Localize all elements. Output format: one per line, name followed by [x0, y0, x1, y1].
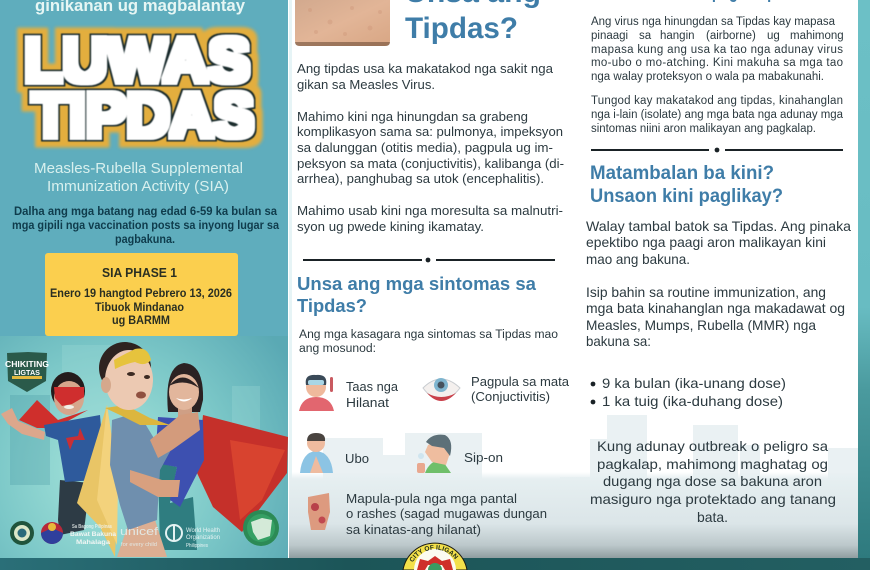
text block: outbreak note: Kung adunay outbreak o peligro sa [597, 438, 828, 454]
text block: measles description: peksyon sa mata (conjuctivitis), kalibanga (di- [297, 156, 564, 171]
heading: treatment and prevention [590, 162, 783, 207]
subtitle: Measles-Rubella Supplemental [34, 161, 243, 177]
symptom: cough: Ubo [345, 451, 369, 466]
instruction text [12, 206, 280, 246]
logo: World Health Organization: Philippines [186, 543, 208, 549]
list: vaccine dose schedule [591, 375, 786, 409]
badge: Chikiting Ligtas shield [5, 352, 49, 392]
illustration: girl hero [155, 363, 288, 550]
text block: vaccine prevention: bakuna sa: [586, 333, 651, 349]
logo: Bagong Pilipinas [41, 522, 63, 544]
logo: UNICEF: for every child [121, 542, 157, 548]
logo: Bawat Bakuna Mahalaga: Bawat Bakuna [70, 531, 116, 538]
logo: green emblem [243, 510, 279, 546]
text block: measles description: Mahimo usab kini nga moresulta sa malnutri- [297, 203, 563, 218]
symptom: red eyes: Pagpula sa mata [471, 374, 570, 389]
badge: Chikiting Ligtas shield: CHIKITING [5, 359, 49, 369]
heading: what is measles: Tipdas? [405, 12, 518, 45]
text block: how measles spreads: ug [767, 30, 780, 42]
icon: coughing person [300, 433, 333, 473]
logo: UNICEF [120, 526, 159, 548]
text block: vaccine prevention [586, 218, 851, 349]
text block: measles description: Ang tipdas usa ka makatakod nga sakit nga [297, 61, 554, 76]
symptom: red eyes: (Conjuctivitis) [471, 389, 550, 404]
text block: measles description [297, 61, 564, 234]
callout: SIA phase 1 dates: Enero 19 hangtod Pebrero 13, 2026 [50, 288, 232, 300]
list: vaccine dose schedule: 9 ka bulan (ika-unang dose) [602, 375, 786, 391]
subtitle: Immunization Activity (SIA) [47, 179, 229, 195]
heading: symptoms: Unsa ang mga sintomas sa [297, 273, 537, 294]
logo: UNICEF: unicef [120, 526, 159, 538]
text block: vaccine prevention: mao ang bakuna. [586, 251, 690, 267]
heading: what is measles [405, 0, 541, 45]
symptom: rashes [308, 491, 547, 537]
icon: red eye [423, 378, 460, 401]
heading: treatment and prevention: Matambalan ba kini? [590, 162, 774, 184]
instruction text: pagbakuna. [115, 234, 175, 246]
logo: City of Iligan seal: CITY OF ILIGAN [410, 545, 458, 562]
instruction text: mga gipili nga vaccination posts sa inyong lugar sa [12, 220, 280, 232]
symptom: fever: Hilanat [346, 395, 389, 410]
text block: measles description: syon ug pwede kining ikamatay. [297, 219, 484, 234]
text block: how measles spreads: Tungod kay makatakod ang tipdas, kinahanglan [591, 95, 843, 107]
callout: SIA phase 1 dates [45, 253, 238, 336]
campaign logotype [24, 26, 254, 150]
logo: Bawat Bakuna Mahalaga: Mahalaga [76, 539, 110, 546]
text block: how measles spreads: pinaagi [591, 30, 628, 42]
symptom: red eyes [423, 374, 570, 404]
callout: SIA phase 1 dates: SIA PHASE 1 [102, 266, 177, 280]
text block: symptoms intro: ang mosunod: [299, 343, 376, 355]
symptom: rashes: Mapula-pula nga mga pantal [346, 491, 517, 506]
faded skyline background [289, 415, 858, 558]
photo: measles rash on skin [295, 0, 390, 46]
partner logos row [10, 510, 279, 549]
text block: vaccine prevention: Isip bahin sa routine immunization, ang [586, 284, 826, 300]
instruction text: Dalha ang mga batang nag edad 6-59 ka bulan sa [14, 206, 278, 218]
logo: Bawat Bakuna Mahalaga [70, 524, 116, 546]
text block: measles description: sa dalunggan (otitis media), pagpula ug im- [297, 140, 553, 155]
callout: SIA phase 1 dates: ug BARMM [112, 315, 170, 327]
right edge strip [858, 0, 870, 558]
logo: Bawat Bakuna Mahalaga: Sa Bagong Pilipinas [72, 524, 112, 530]
text block: measles description: Mahimo kini nga hinungdan sa grabeng [297, 109, 528, 124]
symptom: fever: Taas nga [346, 379, 399, 394]
text block: vaccine prevention: epektibo nga paagi aron malikayan kini [586, 234, 826, 250]
text block: how measles spreads: hangin [660, 30, 695, 42]
icon: hand with rash [308, 493, 330, 530]
text block: how measles spreads: mahimong [790, 30, 844, 42]
logo: World Health Organization: Organization [186, 535, 220, 541]
heading: treatment and prevention: Unsaon kini paglikay? [590, 185, 783, 207]
icon: sneezing person [417, 435, 451, 473]
campaign logotype: LUWAS [24, 26, 250, 96]
text block: measles description: komplikasyon sama sa: pulmonya, impeksyon [297, 124, 563, 139]
text block: how measles spreads: mo-ubo o mo-atching. Kini makuha sa mga tao [591, 57, 843, 69]
list: vaccine dose schedule: 1 ka tuig (ika-duhang dose) [602, 393, 783, 409]
logo: City of Iligan seal [402, 542, 468, 570]
text block: how measles spreads: (airborne) [706, 30, 756, 42]
text block: outbreak note: bata. [697, 509, 728, 525]
text block: how measles spreads [591, 16, 844, 135]
illustration: toddler hero with yellow cape [77, 342, 200, 557]
text block: how measles spreads: sa [639, 30, 652, 42]
text block: outbreak note [590, 438, 836, 525]
text block: outbreak note: masiguro nga protektado ang tanang [590, 491, 836, 507]
text block: measles description: arrhea), panghubag sa utok (encephalitis). [297, 171, 544, 186]
text block: outbreak note: pagkalap, mahimong maghatag og [597, 456, 828, 472]
text block: how measles spreads: Ang virus nga hinungdan sa Tipdas kay mapasa [591, 16, 836, 28]
heading: symptoms: Tipdas? [297, 295, 367, 316]
campaign logotype: TIPDAS [32, 82, 254, 150]
badge: Chikiting Ligtas shield: LIGTAS [14, 368, 40, 377]
logo: World Health Organization: World Health [186, 528, 220, 534]
text block: vaccine prevention: mga bata kinahanglan nga makadawat og [586, 300, 845, 316]
text block: how measles spreads: mapasa kung ang usa ka tao nga adunay virus [591, 44, 843, 56]
background city skyline [10, 345, 260, 506]
text block: vaccine prevention: Measles, Mumps, Rubella (MMR) nga [586, 317, 816, 333]
illustration: boy hero in red mask [1, 372, 103, 535]
logo: Department of Health seal [10, 521, 34, 545]
text block: how measles spreads: sintomas niini aron malikayan ang pagkalap. [591, 123, 816, 135]
panel: left campaign cover [0, 0, 288, 558]
text block: measles description: gikan sa Measles Virus. [297, 77, 435, 92]
symptom: rashes: o rashes (sagad mugawas dungan [346, 506, 547, 521]
logo: World Health Organization [166, 525, 220, 549]
symptom: fever [299, 375, 399, 411]
symptom: cough [300, 433, 369, 473]
text block: vaccine prevention: Walay tambal batok sa Tipdas. Ang pinaka [586, 218, 851, 234]
symptom: runny nose: Sip-on [464, 450, 503, 465]
subtitle [34, 161, 243, 195]
symptom: rashes: sa kinatas-ang hilanat) [346, 522, 481, 537]
text block: symptoms intro: Ang mga kasagara nga sintomas sa Tipdas mao [299, 329, 558, 341]
panel: main white sheet [289, 0, 858, 558]
icon: person with fever [299, 375, 334, 411]
heading: symptoms [297, 273, 537, 316]
bottom dark band [0, 558, 870, 570]
text block: how measles spreads: nga i-lain (isolate) ang mga bata nga adunay mga [591, 109, 844, 121]
text block: outbreak note: dugang nga dose sa bakuna aron [603, 473, 822, 489]
text block: symptoms intro [299, 329, 558, 355]
text block: how measles spreads: nga walay proteksyon o wala pa mabakunahi. [591, 71, 824, 83]
symptom: runny nose [417, 435, 503, 473]
callout: SIA phase 1 dates: Tibuok Mindanao [95, 302, 184, 314]
